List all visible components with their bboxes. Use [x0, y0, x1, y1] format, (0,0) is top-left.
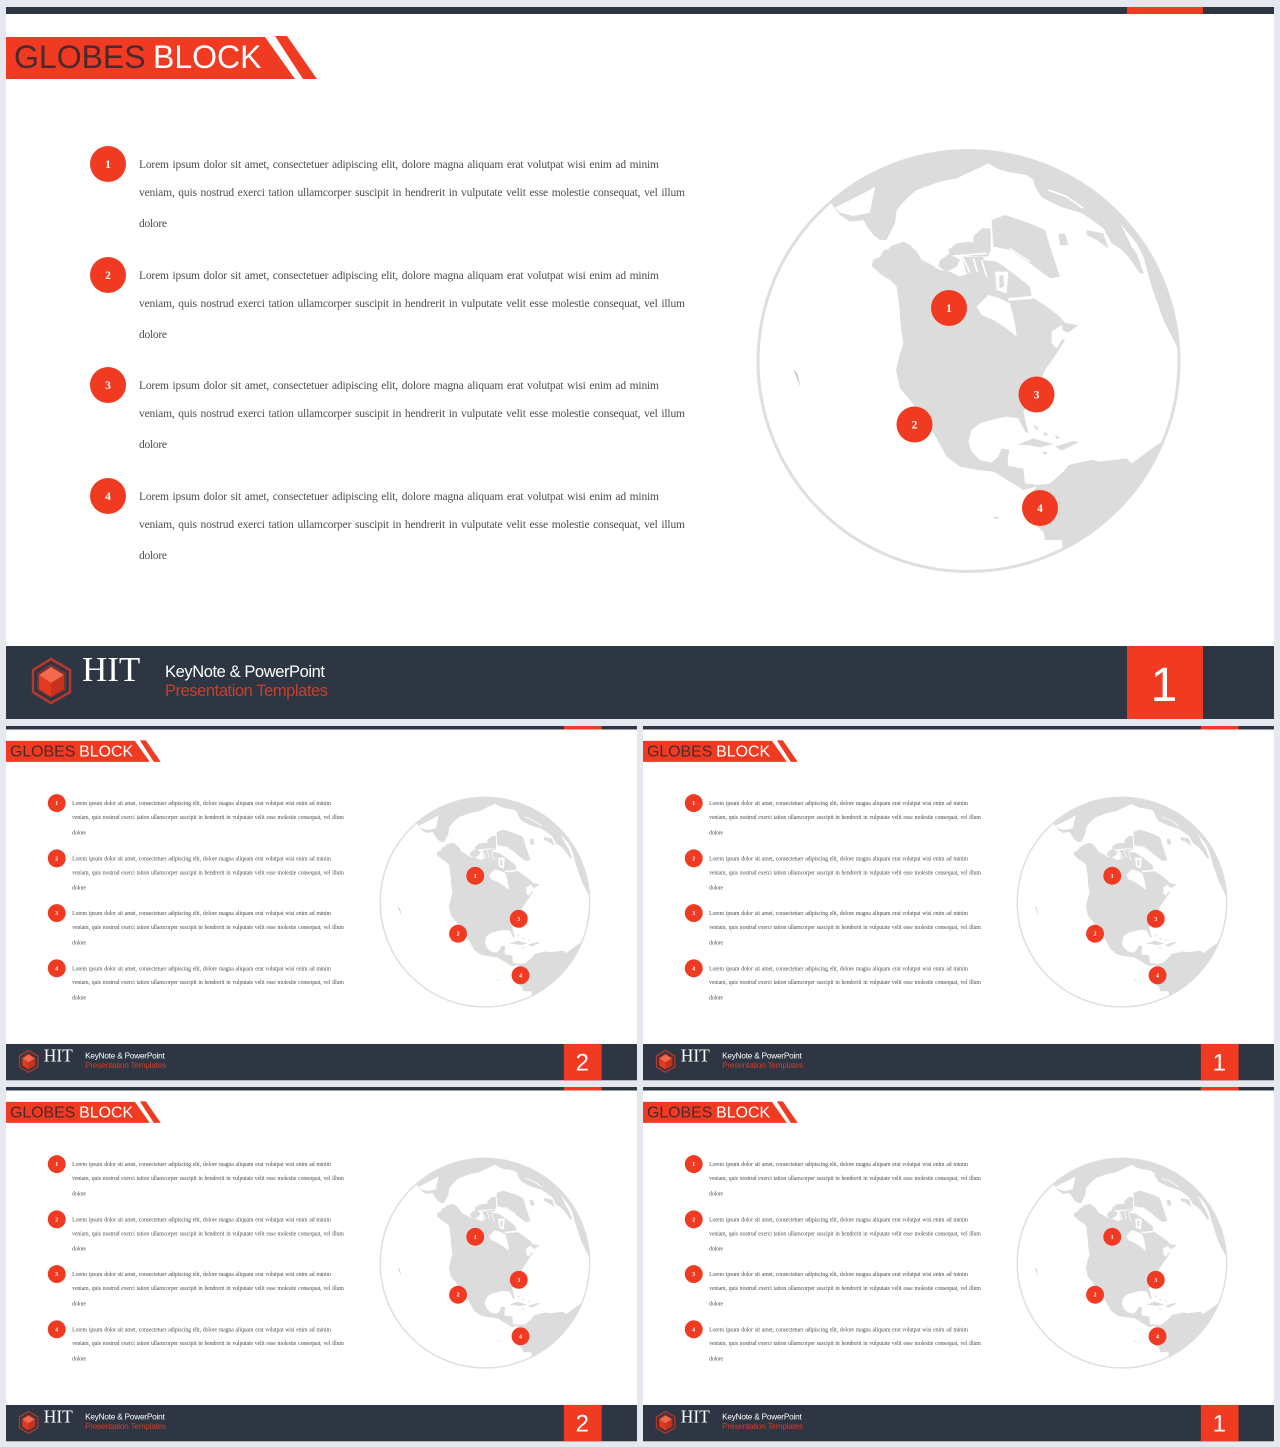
slide 4: small bottom left: Lorem ipsum dolor sit amet, consectetuer adipiscing elit, dolore magna aliquam erat volutpat wisi enim ad minim — [72, 1162, 331, 1168]
slide 5: small bottom right: dolore — [709, 1301, 724, 1307]
slide 1 list item 1: dolore — [139, 218, 167, 230]
slide 3: small top right: veniam, quis nostrud exerci tation ullamcorper suscipit in hendrerit in vulputate velit esse molestie consequat, vel illum — [709, 815, 981, 821]
slide 1 title banner — [6, 36, 317, 79]
slide 1 footer: KeyNote & PowerPoint — [165, 663, 325, 681]
slide 1 footer — [6, 646, 1274, 719]
slide 2: small top left: Lorem ipsum dolor sit amet, consectetuer adipiscing elit, dolore magna aliquam erat volutpat wisi enim ad minim — [72, 801, 331, 807]
slide 3: small top right: Lorem ipsum dolor sit amet, consectetuer adipiscing elit, dolore magna aliquam erat volutpat wisi enim ad minim — [709, 911, 968, 917]
slide 4: small bottom left: 1 — [55, 1162, 58, 1168]
slide 1 globe markers: 3 — [1034, 390, 1040, 402]
slide 2: small top left: BLOCK — [79, 743, 133, 760]
slide 4: small bottom left: GLOBES — [10, 1104, 75, 1121]
slide 5: small bottom right: dolore — [709, 1357, 724, 1363]
slide 4: small bottom left: KeyNote & PowerPoint — [85, 1412, 165, 1421]
slide 1 list item 2: Lorem ipsum dolor sit amet, consectetuer adipiscing elit, dolore magna aliquam erat volutpat wisi enim ad minim — [139, 270, 659, 282]
slide 4: small bottom left: 3 — [55, 1272, 58, 1278]
slide 1 list item 1: veniam, quis nostrud exerci tation ullamcorper suscipit in hendrerit in vulputate velit esse molestie consequat, vel illum — [139, 187, 685, 199]
slide 2: small top left: 2 — [55, 856, 58, 862]
slide 4: small bottom left: Lorem ipsum dolor sit amet, consectetuer adipiscing elit, dolore magna aliquam erat volutpat wisi enim ad minim — [72, 1327, 331, 1333]
slide 5: small bottom right: 4 — [1156, 1334, 1159, 1340]
slide 2: small top left: Lorem ipsum dolor sit amet, consectetuer adipiscing elit, dolore magna aliquam erat volutpat wisi enim ad minim — [72, 966, 331, 972]
slide 3: small top right: dolore — [709, 886, 724, 892]
slide 4: small bottom left: 4 — [519, 1334, 522, 1340]
slide 1 footer: 1 — [1151, 659, 1177, 712]
slide 2: small top left: veniam, quis nostrud exerci tation ullamcorper suscipit in hendrerit in vulputate velit esse molestie consequat, vel illum — [72, 815, 344, 821]
slide 1 panel — [6, 7, 1274, 719]
slide 1 list item 2: dolore — [139, 329, 167, 341]
slide 5: small bottom right: Lorem ipsum dolor sit amet, consectetuer adipiscing elit, dolore magna aliquam erat volutpat wisi enim ad minim — [709, 1272, 968, 1278]
slide 2: small top left: veniam, quis nostrud exerci tation ullamcorper suscipit in hendrerit in vulputate velit esse molestie consequat, vel illum — [72, 870, 344, 876]
slide 1 list item 4: dolore — [139, 550, 167, 562]
slide 3: small top right: Lorem ipsum dolor sit amet, consectetuer adipiscing elit, dolore magna aliquam erat volutpat wisi enim ad minim — [709, 856, 968, 862]
slide 3: small top right: veniam, quis nostrud exerci tation ullamcorper suscipit in hendrerit in vulputate velit esse molestie consequat, vel illum — [709, 870, 981, 876]
slide 2: small top left: dolore — [72, 830, 87, 836]
slide 4: small bottom left: dolore — [72, 1301, 87, 1307]
slide 1 list item 4: 4 — [105, 491, 111, 503]
slide 2: small top left: 1 — [474, 874, 477, 880]
slide 4: small bottom left: veniam, quis nostrud exerci tation ullamcorper suscipit in hendrerit in vulputate velit esse molestie consequat, vel illum — [72, 1231, 344, 1237]
slide 3: small top right: Lorem ipsum dolor sit amet, consectetuer adipiscing elit, dolore magna aliquam erat volutpat wisi enim ad minim — [709, 966, 968, 972]
slide 4: small bottom left: dolore — [72, 1357, 87, 1363]
slide 3: small top right — [643, 726, 1274, 1080]
slide 2: small top left: Lorem ipsum dolor sit amet, consectetuer adipiscing elit, dolore magna aliquam erat volutpat wisi enim ad minim — [72, 856, 331, 862]
slide 3: small top right: 1 — [692, 801, 695, 807]
slide 1 list item 4: Lorem ipsum dolor sit amet, consectetuer adipiscing elit, dolore magna aliquam erat volutpat wisi enim ad minim — [139, 491, 659, 503]
slide 3: small top right: Lorem ipsum dolor sit amet, consectetuer adipiscing elit, dolore magna aliquam erat volutpat wisi enim ad minim — [709, 801, 968, 807]
slide 4: small bottom left: HIT — [44, 1406, 73, 1426]
slide 5: small bottom right: BLOCK — [716, 1104, 770, 1121]
slide 1 list item 1: Lorem ipsum dolor sit amet, consectetuer adipiscing elit, dolore magna aliquam erat volutpat wisi enim ad minim — [139, 159, 659, 171]
slide 1 list item 3: veniam, quis nostrud exerci tation ullamcorper suscipit in hendrerit in vulputate velit esse molestie consequat, vel illum — [139, 408, 685, 420]
slide 5: small bottom right: Lorem ipsum dolor sit amet, consectetuer adipiscing elit, dolore magna aliquam erat volutpat wisi enim ad minim — [709, 1217, 968, 1223]
slide 5: small bottom right: Lorem ipsum dolor sit amet, consectetuer adipiscing elit, dolore magna aliquam erat volutpat wisi enim ad minim — [709, 1327, 968, 1333]
slide 4: small bottom left: Presentation Templates — [85, 1422, 166, 1431]
slide 2: small top left: 4 — [55, 966, 58, 972]
slide 1 list item 3: 3 — [105, 380, 111, 392]
slide 4: small bottom left: veniam, quis nostrud exerci tation ullamcorper suscipit in hendrerit in vulputate velit esse molestie consequat, vel illum — [72, 1341, 344, 1347]
slide 3: small top right: GLOBES — [647, 743, 712, 760]
slide 1 globe markers — [896, 290, 1058, 526]
slide 5: small bottom right: 1 — [692, 1162, 695, 1168]
slide 4: small bottom left: veniam, quis nostrud exerci tation ullamcorper suscipit in hendrerit in vulputate velit esse molestie consequat, vel illum — [72, 1286, 344, 1292]
slide 4: small bottom left — [6, 1087, 637, 1441]
slide 3: small top right: KeyNote & PowerPoint — [722, 1051, 802, 1060]
slide 4: small bottom left: dolore — [72, 1191, 87, 1197]
slide 5: small bottom right: veniam, quis nostrud exerci tation ullamcorper suscipit in hendrerit in vulputate velit esse molestie consequat, vel illum — [709, 1341, 981, 1347]
slide 1: large — [6, 7, 1274, 719]
slide 1 top bar — [6, 7, 1274, 14]
slide 1 globe markers: 2 — [912, 420, 918, 432]
slide 2: small top left: veniam, quis nostrud exerci tation ullamcorper suscipit in hendrerit in vulputate velit esse molestie consequat, vel illum — [72, 925, 344, 931]
slide 2: small top left: 3 — [55, 911, 58, 917]
slide 1 title banner: BLOCK — [153, 39, 261, 75]
slide 2: small top left: 2 — [576, 1049, 589, 1076]
slide 5: small bottom right: 3 — [1154, 1278, 1157, 1284]
slide 5: small bottom right: 3 — [692, 1272, 695, 1278]
slide 5: small bottom right: veniam, quis nostrud exerci tation ullamcorper suscipit in hendrerit in vulputate velit esse molestie consequat, vel illum — [709, 1176, 981, 1182]
slide 2: small top left — [6, 726, 637, 1080]
slide 5: small bottom right: 1 — [1111, 1235, 1114, 1241]
slide 4: small bottom left: 4 — [55, 1327, 58, 1333]
slide 4: small bottom left: Lorem ipsum dolor sit amet, consectetuer adipiscing elit, dolore magna aliquam erat volutpat wisi enim ad minim — [72, 1217, 331, 1223]
slide 2: small top left: Lorem ipsum dolor sit amet, consectetuer adipiscing elit, dolore magna aliquam erat volutpat wisi enim ad minim — [72, 911, 331, 917]
slide 5: small bottom right: KeyNote & PowerPoint — [722, 1412, 802, 1421]
slide 4: small bottom left: 2 — [457, 1293, 460, 1299]
slide 3: small top right: 4 — [1156, 973, 1159, 979]
slide 4: small bottom left: 1 — [474, 1235, 477, 1241]
slide 4: small bottom left: 2 — [55, 1217, 58, 1223]
slide 4: small bottom left: dolore — [72, 1247, 87, 1253]
slide 5: small bottom right: GLOBES — [647, 1104, 712, 1121]
slide 5: small bottom right: Presentation Templates — [722, 1422, 803, 1431]
slide 1 list item 2: veniam, quis nostrud exerci tation ullamcorper suscipit in hendrerit in vulputate velit esse molestie consequat, vel illum — [139, 298, 685, 310]
slide 2: small top left: HIT — [44, 1045, 73, 1065]
slide 5: small bottom right: 1 — [1213, 1410, 1226, 1437]
slide 4: small bottom left: 2 — [576, 1410, 589, 1437]
slide 1 globe markers: 4 — [1037, 503, 1043, 515]
slide 3: small top right: veniam, quis nostrud exerci tation ullamcorper suscipit in hendrerit in vulputate velit esse molestie consequat, vel illum — [709, 980, 981, 986]
slide 1 globe map — [758, 150, 1179, 572]
slide 3: small top right: 2 — [692, 856, 695, 862]
slide 5: small bottom right: dolore — [709, 1247, 724, 1253]
slide 1 list item 2: 2 — [105, 270, 111, 282]
slide 2: small top left: 1 — [55, 801, 58, 807]
slide 5: small bottom right: HIT — [681, 1406, 710, 1426]
slide 5: small bottom right: veniam, quis nostrud exerci tation ullamcorper suscipit in hendrerit in vulputate velit esse molestie consequat, vel illum — [709, 1286, 981, 1292]
slide 3: small top right: dolore — [709, 940, 724, 946]
slide 5: small bottom right: dolore — [709, 1191, 724, 1197]
slide 2: small top left: 4 — [519, 973, 522, 979]
slide 2: small top left: GLOBES — [10, 743, 75, 760]
slide 1 globe markers: 1 — [946, 303, 952, 315]
slide 1 list item 3: Lorem ipsum dolor sit amet, consectetuer adipiscing elit, dolore magna aliquam erat volutpat wisi enim ad minim — [139, 380, 659, 392]
slide 3: small top right: Presentation Templates — [722, 1061, 803, 1070]
slide 3: small top right: 3 — [692, 911, 695, 917]
slide 1 footer: HIT — [82, 650, 140, 689]
slide 3: small top right: 3 — [1154, 917, 1157, 923]
slide 4: small bottom left: Lorem ipsum dolor sit amet, consectetuer adipiscing elit, dolore magna aliquam erat volutpat wisi enim ad minim — [72, 1272, 331, 1278]
slide 5: small bottom right: 2 — [1094, 1293, 1097, 1299]
slide 2: small top left: dolore — [72, 940, 87, 946]
slide 5: small bottom right: veniam, quis nostrud exerci tation ullamcorper suscipit in hendrerit in vulputate velit esse molestie consequat, vel illum — [709, 1231, 981, 1237]
slide 5: small bottom right: 2 — [692, 1217, 695, 1223]
slide 1 footer: Presentation Templates — [165, 682, 328, 700]
slide 1 list item 4: veniam, quis nostrud exerci tation ullamcorper suscipit in hendrerit in vulputate velit esse molestie consequat, vel illum — [139, 519, 685, 531]
slide 2: small top left: dolore — [72, 886, 87, 892]
slide 2: small top left: 2 — [457, 932, 460, 938]
slide 3: small top right: 1 — [1111, 874, 1114, 880]
slide 5: small bottom right: 4 — [692, 1327, 695, 1333]
slide 4: small bottom left: 3 — [517, 1278, 520, 1284]
slide 1 list item 3: dolore — [139, 439, 167, 451]
slide 3: small top right: veniam, quis nostrud exerci tation ullamcorper suscipit in hendrerit in vulputate velit esse molestie consequat, vel illum — [709, 925, 981, 931]
slide 3: small top right: 1 — [1213, 1049, 1226, 1076]
slide 5: small bottom right: Lorem ipsum dolor sit amet, consectetuer adipiscing elit, dolore magna aliquam erat volutpat wisi enim ad minim — [709, 1162, 968, 1168]
slide 3: small top right: BLOCK — [716, 743, 770, 760]
slide 2: small top left: dolore — [72, 996, 87, 1002]
slide 2: small top left: veniam, quis nostrud exerci tation ullamcorper suscipit in hendrerit in vulputate velit esse molestie consequat, vel illum — [72, 980, 344, 986]
slide 3: small top right: dolore — [709, 830, 724, 836]
slide 4: small bottom left: BLOCK — [79, 1104, 133, 1121]
slide 3: small top right: 4 — [692, 966, 695, 972]
slide 3: small top right: 2 — [1094, 932, 1097, 938]
slide 3: small top right: HIT — [681, 1045, 710, 1065]
slide 3: small top right: dolore — [709, 996, 724, 1002]
slide 1 list item 3 — [90, 367, 685, 451]
slide 2: small top left: 3 — [517, 917, 520, 923]
slide 2: small top left: Presentation Templates — [85, 1061, 166, 1070]
slide 2: small top left: KeyNote & PowerPoint — [85, 1051, 165, 1060]
slide 1 title banner: GLOBES — [14, 39, 146, 75]
slide 1 list item 1 — [90, 146, 685, 230]
slide 1 list item 1: 1 — [105, 159, 111, 171]
slide 4: small bottom left: veniam, quis nostrud exerci tation ullamcorper suscipit in hendrerit in vulputate velit esse molestie consequat, vel illum — [72, 1176, 344, 1182]
slide 5: small bottom right — [643, 1087, 1274, 1441]
slide 1 list item 4 — [90, 478, 685, 562]
slide 1 list item 2 — [90, 257, 685, 341]
